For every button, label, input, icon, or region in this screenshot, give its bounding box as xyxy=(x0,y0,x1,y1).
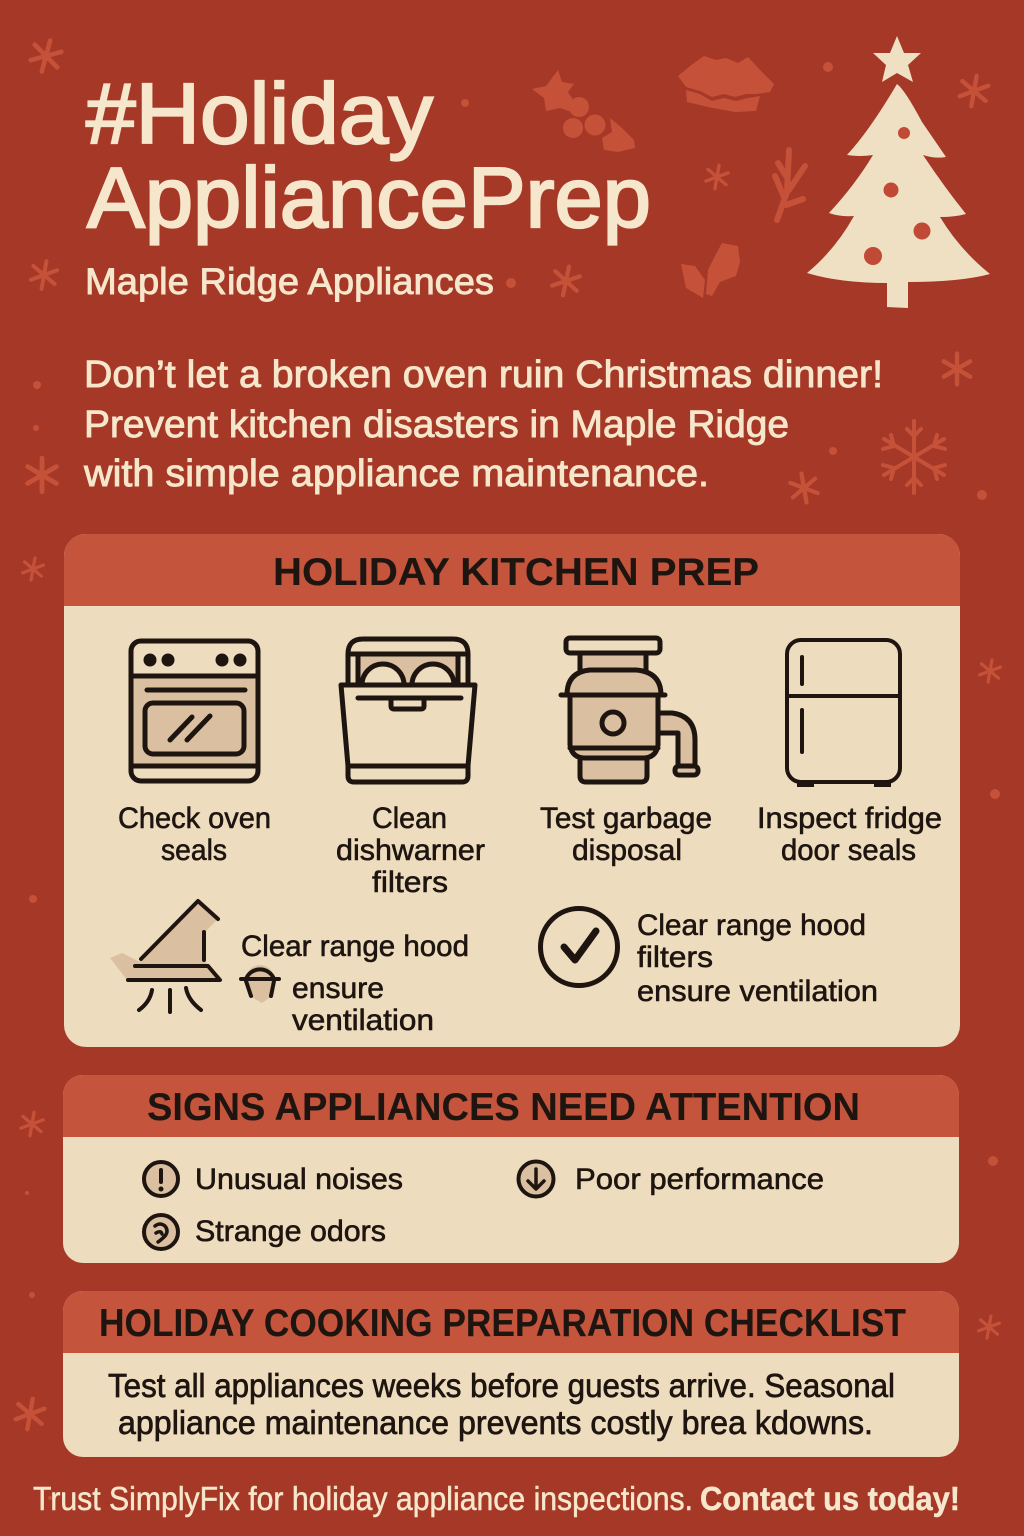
motif: pie xyxy=(678,56,774,112)
label: clean dishwarner filters: Clean xyxy=(372,802,447,835)
icon: down arrow xyxy=(518,1162,554,1196)
motif: holly cluster xyxy=(532,70,635,152)
icon: small hood xyxy=(241,965,279,1003)
heading: signs: SIGNS APPLIANCES NEED ATTENTION xyxy=(147,1086,860,1129)
intro text: with simple appliance maintenance. xyxy=(83,453,709,495)
label: clear range hood: ensure xyxy=(292,972,384,1005)
label: clean dishwarner filters: dishwarner xyxy=(336,834,485,867)
footer call to action: Contact us today! xyxy=(700,1480,960,1517)
icon: christmas tree xyxy=(807,36,990,308)
intro text: Don’t let a broken oven ruin Christmas dinner! xyxy=(84,354,883,396)
label: test garbage disposal: Test garbage xyxy=(540,802,712,835)
label: check oven seals: seals xyxy=(161,834,227,867)
checklist body text xyxy=(108,1367,895,1441)
intro text xyxy=(83,354,883,495)
intro text: Prevent kitchen disasters in Maple Ridge xyxy=(84,404,789,446)
panel: holiday cooking preparation checklist xyxy=(63,1291,959,1457)
label: inspect fridge door seals: Inspect fridge xyxy=(757,802,942,835)
label: clean dishwarner filters: filters xyxy=(372,866,448,899)
label: clear range hood: ventilation xyxy=(292,1004,434,1037)
motif: leaf sprig xyxy=(775,150,805,220)
label: unusual noises: Unusual noises xyxy=(195,1163,403,1196)
label: poor performance: Poor performance xyxy=(575,1163,824,1196)
title xyxy=(86,67,651,246)
icon: exclamation xyxy=(144,1162,178,1196)
checklist body text: appliance maintenance prevents costly brea kdowns. xyxy=(118,1404,873,1441)
icon: check circle xyxy=(540,908,618,986)
title: AppliancePrep xyxy=(87,151,651,246)
heading: checklist: HOLIDAY COOKING PREPARATION CHECKLIST xyxy=(99,1302,906,1345)
icon: dishwasher xyxy=(341,639,475,782)
icon: fridge xyxy=(787,640,900,787)
panel: holiday kitchen prep xyxy=(64,534,960,1047)
label: inspect fridge door seals: door seals xyxy=(781,834,916,867)
label: strange odors: Strange odors xyxy=(195,1215,386,1248)
subtitle: Maple Ridge Appliances xyxy=(85,261,494,302)
label: clear range hood xyxy=(241,930,469,1037)
label: clear range hood filters xyxy=(637,909,878,1008)
label: inspect fridge door seals xyxy=(757,802,942,867)
icon: range hood xyxy=(110,900,220,1012)
label: test garbage disposal: disposal xyxy=(572,834,682,867)
icon: odor swirl xyxy=(144,1215,178,1249)
label: check oven seals: Check oven xyxy=(118,802,271,835)
label: clear range hood filters: Clear range hood xyxy=(637,909,866,942)
heading: holiday kitchen prep: HOLIDAY KITCHEN PREP xyxy=(273,551,759,594)
footer call to action: Trust SimplyFix for holiday appliance inspections. xyxy=(33,1480,693,1517)
label: clean dishwarner filters xyxy=(336,802,485,899)
label: test garbage disposal xyxy=(540,802,712,867)
label: clear range hood: Clear range hood xyxy=(241,930,469,963)
checklist body text: Test all appliances weeks before guests arrive. Seasonal xyxy=(108,1367,895,1404)
panel: signs appliances need attention xyxy=(63,1075,959,1263)
title: #Holiday xyxy=(86,67,434,162)
icon: oven xyxy=(131,641,258,781)
icon: garbage disposal xyxy=(561,638,698,782)
motif: leaves xyxy=(681,243,740,298)
label: clear range hood filters: filters xyxy=(637,941,713,974)
label: clear range hood filters: ensure ventilation xyxy=(637,975,878,1008)
label: check oven seals xyxy=(118,802,271,867)
